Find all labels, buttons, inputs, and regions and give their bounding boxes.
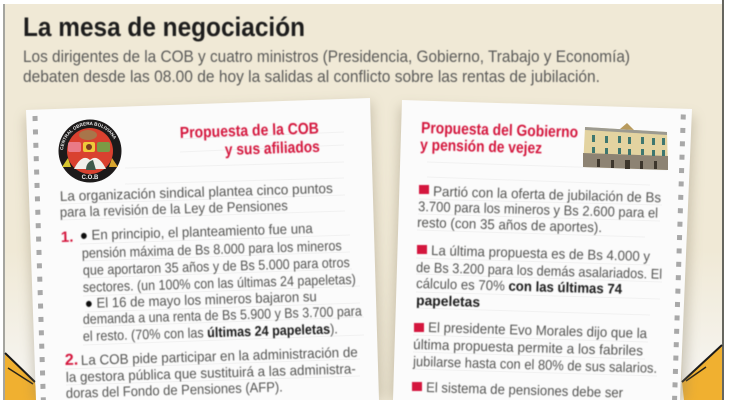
text: COB points: sectores. (un 100% con las últimas 24 papeletas) bbox=[83, 271, 356, 295]
text: Government points: La última propuesta es de Bs 4.000 y bbox=[431, 242, 650, 264]
spiral holes right bbox=[674, 114, 683, 400]
text: COB points: ● En principio, el planteamiento fue una bbox=[80, 220, 313, 243]
text: COB points: la gestora pública que sustituirá a las administra- bbox=[66, 360, 356, 385]
text: COB points: pensión máxima de Bs 8.000 para los mineros bbox=[82, 237, 342, 261]
text: COB points: demanda a una renta de Bs 5.900 y Bs 3.700 para bbox=[83, 303, 362, 327]
text: Government points: 3.700 para los mineros y Bs 2.600 para el bbox=[418, 198, 658, 221]
text: COB points bbox=[60, 180, 362, 400]
intro text: Los dirigentes de la COB y cuatro ministros (Presidencia, Gobierno, Trabajo y Economía) bbox=[23, 47, 630, 66]
text: Government points bbox=[412, 183, 662, 400]
text: Government points: papeletas bbox=[416, 292, 481, 310]
text: Government points: resto (con 35 años de aportes). bbox=[417, 214, 602, 235]
text: COB points: La organización sindical plantea cinco puntos bbox=[60, 180, 333, 204]
decorative pale strip: right bbox=[682, 250, 722, 385]
panel: COB proposal bbox=[20, 97, 386, 400]
spiral holes left bbox=[35, 116, 43, 400]
title: La mesa de negociación bbox=[23, 12, 305, 42]
heading: COB proposal: Propuesta de la COB bbox=[180, 120, 319, 142]
panel: Government proposal bbox=[390, 100, 694, 400]
heading: Government proposal: y pensión de vejez bbox=[420, 137, 542, 157]
decorative yellow corner: left bbox=[5, 353, 37, 400]
text: COB points: ● El 16 de mayo los mineros bajaron su bbox=[85, 288, 317, 311]
emblem: COB logo: CENTRAL OBRERA BOLIVIANA bbox=[60, 122, 116, 150]
intro text bbox=[23, 47, 630, 86]
text: Government points: El presidente Evo Morales dijo que la bbox=[428, 319, 647, 341]
heading: Government proposal: Propuesta del Gobierno bbox=[421, 120, 578, 141]
text: COB points: el resto. (70% con las últimas 24 papeletas). bbox=[83, 320, 338, 344]
text: Government points: jubilarse hasta con el 80% de sus salarios. bbox=[412, 353, 657, 376]
text: COB points: 2. bbox=[65, 352, 78, 369]
ruled lines right bbox=[413, 162, 667, 376]
intro text: debaten desde las 08.00 de hoy la salidas al conflicto sobre las rentas de jubilación. bbox=[23, 67, 600, 86]
text: Government points: cálculo es 70% con las últimas 74 bbox=[416, 275, 622, 297]
ruled lines left bbox=[60, 132, 364, 385]
text: COB points: que aportaron 35 años y de Bs 5.000 para otros bbox=[83, 254, 350, 278]
text: Government points: de Bs 3.200 para los demás asalariados. El bbox=[416, 259, 662, 282]
decorative pale strip: left bbox=[5, 250, 36, 385]
text: COB points: 1. bbox=[61, 229, 74, 246]
emblem: COB logo bbox=[58, 120, 122, 182]
heading: COB proposal bbox=[180, 120, 320, 159]
text: COB points: para la revisión de la Ley de Pensiones bbox=[60, 197, 288, 220]
text: COB points: La COB pide participar en la administración de bbox=[81, 344, 358, 368]
icon: government palace bbox=[583, 123, 668, 170]
heading: COB proposal: y sus afiliados bbox=[225, 139, 320, 159]
heading: Government proposal bbox=[420, 120, 578, 157]
text: Government points: Partió con la oferta de jubilación de Bs bbox=[433, 183, 661, 205]
text: Government points: última propuesta permite a los fabriles bbox=[413, 336, 643, 358]
decorative yellow corner: right bbox=[682, 345, 722, 400]
emblem: COB logo: C.O.B bbox=[82, 175, 99, 181]
